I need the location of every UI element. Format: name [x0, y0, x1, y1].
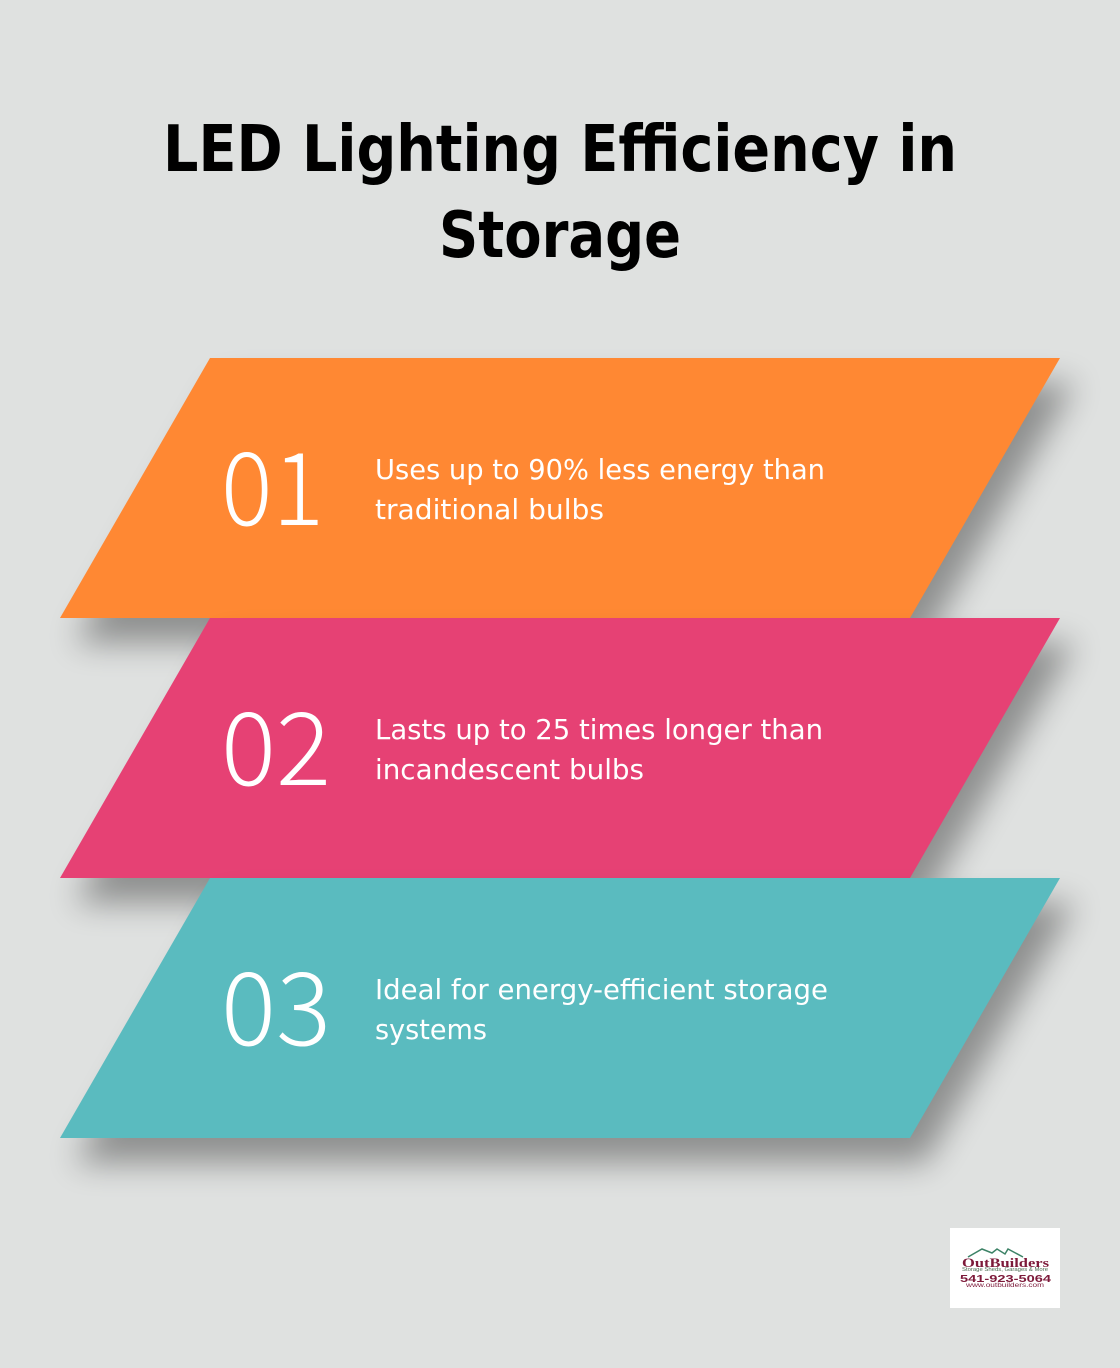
text: step 01: [375, 453, 825, 526]
text: step 03: Ideal for energy-efficient storage: [375, 973, 828, 1006]
logo: OutBuilders: [962, 1255, 1049, 1270]
text: step 01: traditional bulbs: [375, 493, 604, 526]
panel: step 03: [60, 878, 1075, 1163]
title: LED Lighting Efficiency in: [163, 113, 957, 187]
number 03: 03: [221, 929, 331, 1075]
logo: www.outbuilders.com: [965, 1283, 1044, 1289]
panel: step 02: [60, 618, 1075, 903]
logo: 541-923-5064: [960, 1274, 1052, 1285]
number 02: 02: [221, 669, 331, 815]
logo: [950, 1228, 1060, 1308]
text: step 02: incandescent bulbs: [375, 753, 644, 786]
panel: step 01: [60, 358, 1075, 643]
text: step 03: systems: [375, 1013, 487, 1046]
logo: Storage Sheds, Garages & More: [962, 1267, 1048, 1273]
text: step 01: Uses up to 90% less energy than: [375, 453, 825, 486]
icon: roofline: [968, 1249, 1023, 1257]
title: [163, 113, 957, 273]
text: step 02: [375, 713, 823, 786]
text: step 03: [375, 973, 828, 1046]
number 01: 01: [221, 409, 324, 555]
text: step 02: Lasts up to 25 times longer than: [375, 713, 823, 746]
title: Storage: [439, 199, 681, 273]
